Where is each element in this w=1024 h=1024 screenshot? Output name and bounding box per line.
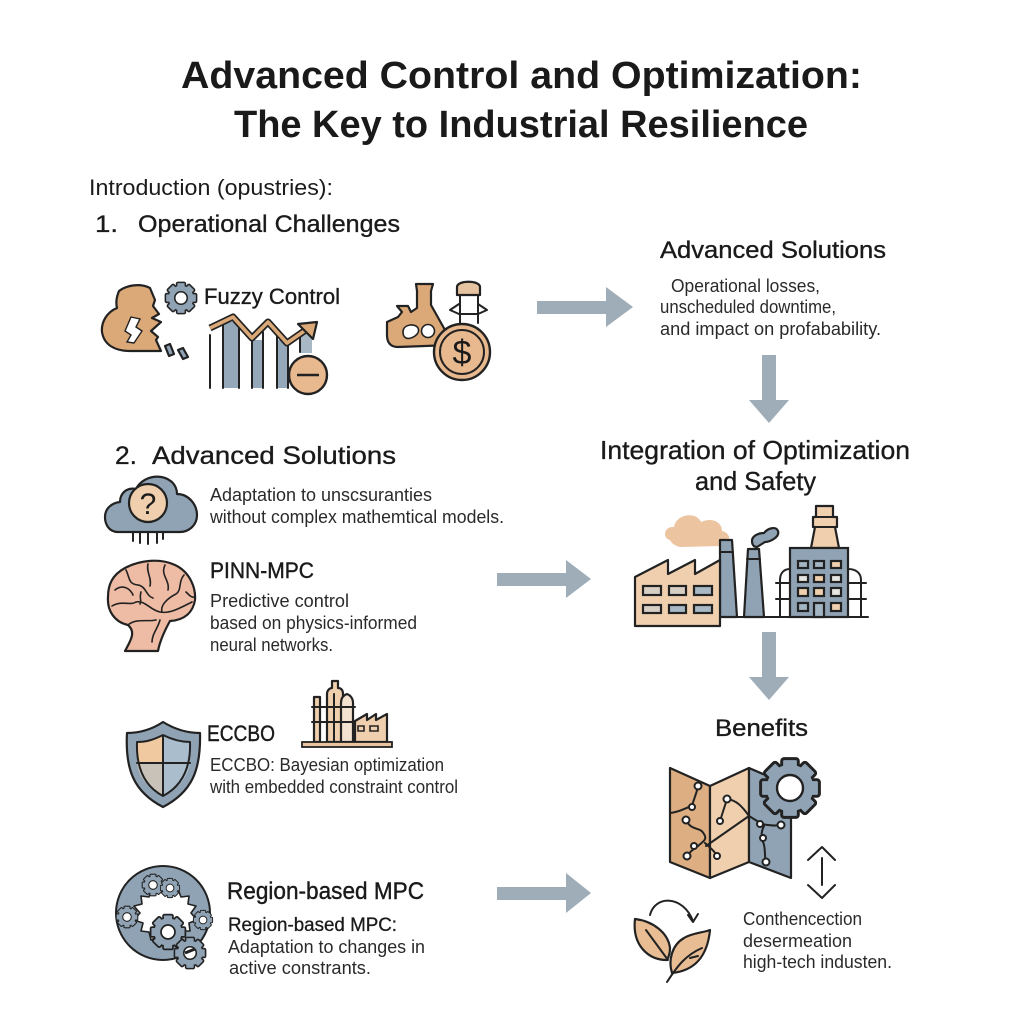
text: region-based MPC: Region-based MPC (227, 878, 424, 905)
icon: flask and coin (387, 282, 490, 380)
heading: integration of optimization and safety: and Safety (695, 466, 816, 496)
text: benefits description: Conthencection (743, 909, 862, 929)
text: PINN-MPC (210, 558, 417, 655)
icon: uncertainty cloud (105, 477, 197, 544)
icon: gear ring (116, 866, 213, 969)
text: PINN-MPC: PINN-MPC (210, 558, 314, 583)
icon: process map with gear (670, 759, 819, 878)
text: PINN-MPC: neural networks. (210, 635, 333, 655)
icon: leaves with cycle arrow (635, 901, 710, 982)
heading: operational challenges: 1. (95, 211, 118, 238)
text: ECCBO: ECCBO: Bayesian optimization (210, 755, 444, 775)
text: operational losses (660, 276, 881, 339)
heading: advanced solutions left: 2. (115, 442, 137, 470)
text: benefits description: high-tech industen. (743, 952, 892, 972)
label: fuzzy control: Fuzzy Control (204, 284, 340, 309)
text: region-based MPC: active constrants. (229, 958, 371, 978)
heading: integration of optimization and safety: Integration of Optimization (600, 435, 910, 465)
text: ECCBO: with embedded constraint control (209, 777, 458, 797)
icon: factory and plant (635, 506, 868, 626)
text: ECCBO: ECCBO (207, 721, 275, 746)
icon: cracked rock (102, 285, 188, 359)
text: benefits description (743, 909, 892, 972)
text: region-based MPC: Region-based MPC: (228, 915, 397, 936)
text: PINN-MPC: Predictive control (210, 591, 349, 611)
text: operational losses: unscheduled downtime, (660, 297, 836, 317)
icon: brain (108, 561, 195, 651)
arrow: down to benefits (749, 632, 789, 700)
heading: advanced solutions left: Advanced Solutions (152, 442, 396, 470)
icon: shield (127, 722, 200, 807)
text: operational losses: and impact on profabability. (660, 319, 881, 339)
text: operational losses: Operational losses, (671, 276, 820, 296)
arrow: down to integration (749, 355, 789, 423)
arrow: region MPC to benefits (497, 873, 591, 913)
heading: integration of optimization and safety (600, 435, 910, 496)
text: adaptation to uncertainties: Adaptation to unscsuranties (210, 485, 432, 505)
text: region-based MPC: Adaptation to changes in (228, 937, 425, 957)
heading: operational challenges: Operational Challenges (138, 211, 400, 238)
text: ECCBO (207, 721, 458, 797)
heading: advanced solutions right: Advanced Solutions (660, 237, 886, 264)
icon: small refinery (302, 681, 392, 747)
text: adaptation to uncertainties (209, 485, 504, 527)
heading: benefits: Benefits (715, 715, 808, 742)
icon: small gear (165, 282, 197, 314)
text: PINN-MPC: based on physics-informed (210, 613, 417, 633)
title: The Key to Industrial Resilience (234, 104, 808, 146)
text: benefits description: desermeation (743, 931, 852, 951)
text: adaptation to uncertainties: without complex mathemtical models. (209, 507, 504, 527)
arrow: solutions to integration (497, 560, 591, 598)
title (181, 55, 862, 146)
icon: uncertainty cloud: ? (140, 488, 156, 521)
text: region-based MPC (227, 878, 425, 978)
icon: falling chart with minus (210, 317, 327, 394)
title: Advanced Control and Optimization: (181, 55, 862, 97)
arrow: challenges to solutions (537, 287, 633, 327)
introduction label: Introduction (opustries): (89, 175, 333, 200)
icon: flask and coin: $ (453, 334, 472, 372)
icon: up-down arrow (808, 847, 835, 898)
